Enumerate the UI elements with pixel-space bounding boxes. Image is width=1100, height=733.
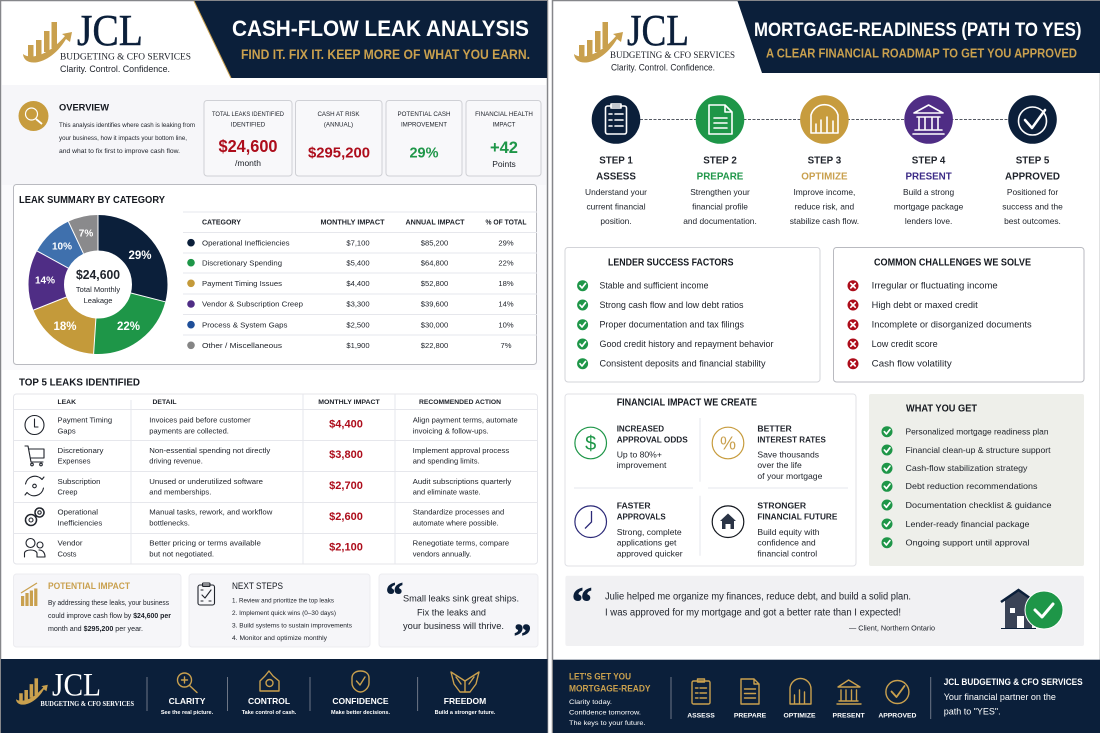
row: vendor: Costs <box>58 549 77 558</box>
donut chart <box>33 215 165 354</box>
footer call to action: Confidence tomorrow. <box>569 710 641 716</box>
impact: approval odds: APPROVAL ODDS <box>617 434 688 444</box>
table: top 5 leaks: DETAIL <box>152 399 177 406</box>
kpi card: health impact: FINANCIAL HEALTH <box>475 111 533 118</box>
kpi card: total leaks: IDENTIFIED <box>231 122 266 128</box>
testimonial <box>565 576 1084 646</box>
row: discretionary: and spending limits. <box>413 457 480 466</box>
header banner <box>194 1 547 78</box>
overview: OVERVIEW <box>59 102 110 112</box>
step 5 <box>1002 95 1063 226</box>
icon: shield check <box>352 671 369 692</box>
panel: what you get: WHAT YOU GET <box>906 404 977 415</box>
card: quote: Small leaks sink great ships. <box>403 594 519 605</box>
step 3 <box>790 95 859 226</box>
panel: lender success factors: LENDER SUCCESS FACTORS <box>608 258 734 269</box>
check list: Stable and sufficient income <box>600 280 709 290</box>
footer item: confidence: Make better decisions. <box>331 710 390 716</box>
impact: faster approvals: APPROVALS <box>617 511 666 521</box>
footer item: approved: APPROVED <box>878 712 917 719</box>
icon: open quote: “ <box>386 577 403 614</box>
icon: document <box>741 679 759 704</box>
icon: check circle <box>1018 107 1046 135</box>
step 2: STEP 2 <box>703 155 737 166</box>
step 5: Positioned for <box>1007 187 1058 197</box>
footer item: assess <box>687 679 715 719</box>
logo: JCL <box>77 6 143 55</box>
footer call to action <box>569 671 650 727</box>
card: potential impact: could improve cash flow by $24,600 per <box>48 613 171 620</box>
donut chart: 14% <box>35 276 55 286</box>
row: subscription: Unused or underutilized software <box>149 477 263 486</box>
impact: financial future: STRONGER <box>757 500 807 510</box>
icon: logo chart <box>574 22 623 63</box>
footer logo <box>16 668 134 708</box>
kpi card: health impact: IMPACT <box>493 122 516 128</box>
kpi card: health impact: Points <box>492 159 516 169</box>
testimonial: I was approved for my mortgage and got a better rate than I expected! <box>605 607 901 618</box>
check list: Personalized mortgage readiness plan <box>906 426 1049 436</box>
step 4: mortgage package <box>894 201 964 211</box>
footer item: approved <box>878 680 917 719</box>
row: payment timing: payments are collected. <box>149 426 229 435</box>
impact: interest rates: INTEREST RATES <box>757 434 826 444</box>
footer <box>553 660 1100 733</box>
impact: interest rates: Save thousands <box>757 449 819 459</box>
row: vendor: Vendor <box>58 539 83 548</box>
kpi card: cash at risk: $295,200 <box>308 146 370 162</box>
testimonial: Julie helped me organize my finances, reduce debt, and build a solid plan. <box>605 592 911 603</box>
footer company info: path to "YES". <box>944 707 1001 717</box>
impact: faster approvals: FASTER <box>617 500 651 510</box>
row: discretionary: Non-essential spending not directly <box>149 446 270 455</box>
row: operational: bottlenecks. <box>149 518 190 527</box>
kpi card: potential improvement: IMPROVEMENT <box>401 122 447 128</box>
step 2: PREPARE <box>697 172 744 183</box>
footer <box>1 659 548 733</box>
card: next steps: 2. Implement quick wins (0–30 days) <box>232 610 336 617</box>
icon: close quote: ” <box>514 618 531 655</box>
card: quote <box>379 574 538 655</box>
card: potential impact: month and $295,200 per year. <box>48 626 143 633</box>
icon: butterfly <box>451 672 479 692</box>
check list <box>577 280 774 369</box>
impact: interest rates <box>712 424 826 481</box>
check list: Documentation checklist & guidance <box>906 500 1052 510</box>
row: payment timing: Invoices paid before customer <box>149 416 251 425</box>
footer item: confidence: CONFIDENCE <box>332 696 389 706</box>
row: payment timing: Align payment terms, automate <box>413 416 518 425</box>
step 1: STEP 1 <box>599 155 633 166</box>
row: payment timing: Payment Timing <box>58 416 112 425</box>
footer company info: JCL BUDGETING & CFO SERVICES <box>944 677 1083 687</box>
check list: Good credit history and repayment behavior <box>600 339 774 349</box>
row: subscription: Creep <box>58 488 78 497</box>
step 3: STEP 3 <box>808 155 842 166</box>
cross list: Incomplete or disorganized documents <box>872 320 1032 330</box>
step 1: current financial <box>586 201 646 211</box>
footer item: control: CONTROL <box>248 696 290 706</box>
card: next steps <box>189 574 370 647</box>
card: next steps: 1. Review and prioritize the top leaks <box>232 598 335 605</box>
row: operational: Operational <box>58 508 98 517</box>
logo: Clarity. Control. Confidence. <box>60 64 170 74</box>
footer item: freedom <box>435 672 496 716</box>
icon: checklist <box>692 679 710 704</box>
step 2 <box>683 95 757 226</box>
testimonial: — Client, Northern Ontario <box>849 624 935 633</box>
footer item: prepare: PREPARE <box>734 712 767 719</box>
footer item: freedom: Build a stronger future. <box>435 710 496 716</box>
row: subscription: and memberships. <box>149 488 211 497</box>
row: subscription: Subscription <box>58 477 100 486</box>
check list: Ongoing support until approval <box>906 538 1030 548</box>
kpi card: cash at risk <box>296 100 382 176</box>
step 3: OPTIMIZE <box>801 172 848 183</box>
table: top 5 leaks: LEAK <box>58 399 76 406</box>
title: CASH-FLOW LEAK ANALYSIS <box>232 16 529 41</box>
category table: % OF TOTAL <box>486 220 527 226</box>
category table: $3,300 <box>346 300 370 309</box>
kpi card: cash at risk: CASH AT RISK <box>317 111 360 118</box>
icon: house with check <box>1001 590 1063 629</box>
impact: faster approvals <box>575 500 683 559</box>
impact: interest rates: of your mortgage <box>757 471 823 481</box>
row: vendor: Better pricing or terms available <box>149 539 261 548</box>
kpi card: health impact <box>466 100 541 176</box>
check list: Financial clean-up & structure support <box>906 445 1051 455</box>
footer item: clarity <box>161 673 214 716</box>
heading: LEAK SUMMARY BY CATEGORY <box>19 195 165 206</box>
logo: BUDGETING & CFO SERVICES <box>60 52 191 62</box>
footer call to action: MORTGAGE-READY <box>569 684 650 694</box>
cross list: Irregular or fluctuating income <box>872 280 998 290</box>
footer item: prepare <box>734 679 767 719</box>
overview: your business, how it impacts your bottom line, <box>59 135 187 142</box>
overview <box>18 101 195 155</box>
panel: lender success factors <box>565 248 820 382</box>
cross list: High debt or maxed credit <box>872 300 978 310</box>
logo: BUDGETING & CFO SERVICES <box>610 51 735 61</box>
kpi card: total leaks: /month <box>235 158 261 168</box>
impact: interest rates: over the life <box>757 460 802 470</box>
footer item: control: Take control of cash. <box>242 710 297 716</box>
row: subscription: and eliminate waste. <box>413 488 481 497</box>
category table: $39,600 <box>421 300 448 309</box>
row: discretionary: $3,800 <box>329 449 363 461</box>
category table: $1,900 <box>346 341 370 350</box>
card: potential impact <box>14 574 181 647</box>
donut chart: $24,600 <box>76 268 120 282</box>
row: vendor: but not negotiated. <box>149 549 214 558</box>
donut chart: 10% <box>52 242 72 252</box>
footer item: optimize <box>783 678 816 719</box>
step 1: Understand your <box>585 187 647 197</box>
kpi card: potential improvement: 29% <box>409 146 439 162</box>
category table: $2,500 <box>346 320 370 329</box>
row: operational: Manual tasks, rework, and workflow <box>149 508 273 517</box>
impact: faster approvals: applications get <box>617 538 677 548</box>
impact: financial future: Build equity with <box>757 527 820 537</box>
category table <box>183 212 537 350</box>
check list: Proper documentation and tax filings <box>600 320 745 330</box>
kpi card: total leaks: $24,600 <box>218 136 278 156</box>
kpi card: total leaks: TOTAL LEAKS IDENTIFIED <box>212 111 284 118</box>
impact: approval odds: Up to 80%+ <box>617 449 662 459</box>
footer item: confidence <box>331 671 390 716</box>
footer item: control <box>242 671 297 716</box>
icon: bank <box>837 680 861 704</box>
category table: $4,400 <box>346 279 370 288</box>
panel: financial impact <box>565 394 856 566</box>
icon: growth chart <box>21 583 37 606</box>
category table: $85,200 <box>421 238 448 247</box>
footer company info: Your financial partner on the <box>944 692 1056 702</box>
kpi card: potential improvement: POTENTIAL CASH <box>397 111 451 118</box>
row: payment timing: Gaps <box>58 426 76 435</box>
impact: interest rates: BETTER <box>757 424 793 434</box>
table: top 5 leaks: MONTHLY IMPACT <box>318 399 381 406</box>
donut chart: 22% <box>117 321 140 333</box>
subtitle: FIND IT. FIX IT. KEEP MORE OF WHAT YOU EARN. <box>241 46 530 62</box>
footer call to action: The keys to your future. <box>569 720 646 727</box>
step 4: PRESENT <box>905 172 952 183</box>
category table: 10% <box>498 320 514 329</box>
card: next steps: NEXT STEPS <box>232 581 283 592</box>
panel: financial impact: FINANCIAL IMPACT WE CREATE <box>617 398 757 409</box>
step 5: success and the <box>1002 201 1063 211</box>
category table: 18% <box>498 279 514 288</box>
donut chart: 29% <box>128 250 152 262</box>
logo: JCL <box>627 6 689 55</box>
icon: people <box>24 538 45 557</box>
impact: approval odds: improvement <box>617 460 667 470</box>
category table: 22% <box>498 258 514 267</box>
logo <box>574 6 735 72</box>
step 4: STEP 4 <box>912 155 946 166</box>
row: operational <box>26 508 504 527</box>
category table: $22,800 <box>421 341 448 350</box>
footer item: present: PRESENT <box>833 712 865 719</box>
icon: money bag <box>260 671 279 691</box>
category table: Payment Timing Issues <box>202 279 282 288</box>
footer call to action: LET'S GET YOU <box>569 671 631 681</box>
icon: cycle arrows <box>25 476 44 496</box>
row: vendor <box>24 538 509 558</box>
step 4: Build a strong <box>903 187 955 197</box>
category table: Operational Inefficiencies <box>202 238 290 247</box>
icon: chart in house <box>811 105 838 133</box>
step 4: lenders love. <box>905 216 952 226</box>
row: subscription <box>25 476 512 497</box>
impact: financial future: confidence and <box>757 538 816 548</box>
category table: 29% <box>498 238 514 247</box>
category table: Discretionary Spending <box>202 258 282 267</box>
donut chart: 7% <box>79 228 93 240</box>
row: payment timing <box>25 416 518 435</box>
table: top 5 leaks: RECOMMENDED ACTION <box>419 399 501 406</box>
cross list: Cash flow volatility <box>872 358 952 368</box>
impact: financial future: FINANCIAL FUTURE <box>757 511 838 521</box>
step 3: stabilize cash flow. <box>790 216 859 226</box>
icon: checklist <box>606 104 626 134</box>
donut chart: 18% <box>53 321 77 333</box>
page: cash-flow leak analysis <box>0 0 548 733</box>
row: operational: $2,600 <box>329 511 363 523</box>
card: quote: Fix the leaks and <box>417 608 486 618</box>
check list: Consistent deposits and financial stability <box>600 358 766 368</box>
row: subscription: Audit subscriptions quarterly <box>413 477 512 486</box>
icon: document <box>709 105 732 134</box>
category table: ANNUAL IMPACT <box>406 220 465 226</box>
check list: Strong cash flow and low debt ratios <box>600 300 744 310</box>
step 2: Strengthen your <box>690 187 750 197</box>
icon: quote mark: “ <box>572 579 592 624</box>
overview: and what to fix first to improve cash flow. <box>59 148 180 155</box>
impact: faster approvals: approved quicker <box>617 549 683 559</box>
footer item: present <box>833 680 865 719</box>
roadmap steps <box>585 95 1063 226</box>
impact: approval odds <box>575 424 688 470</box>
impact: approval odds: INCREASED <box>617 424 664 434</box>
check list: Lender-ready financial package <box>906 519 1030 529</box>
kpi card: health impact: +42 <box>490 139 518 157</box>
category table: MONTHLY IMPACT <box>320 220 385 226</box>
logo: Clarity. Control. Confidence. <box>611 62 715 72</box>
footer logo: BUDGETING & CFO SERVICES <box>40 700 134 708</box>
category table: $52,800 <box>421 279 448 288</box>
row: operational: Inefficiencies <box>58 518 102 527</box>
icon: logo chart <box>23 22 72 63</box>
footer logo: JCL <box>52 668 101 704</box>
table: top 5 leaks <box>14 394 538 564</box>
row: discretionary: Implement approval process <box>413 446 509 455</box>
row: discretionary <box>25 446 509 466</box>
category table: $5,400 <box>346 258 370 267</box>
icon: chart <box>790 678 811 704</box>
icon: check circle <box>886 680 909 704</box>
footer item: assess: ASSESS <box>687 712 715 719</box>
card: quote: your business will thrive. <box>403 621 504 632</box>
icon: magnifier <box>178 673 197 692</box>
icon: bank <box>913 105 944 134</box>
cross list <box>848 280 1032 369</box>
impact: interest rates: % <box>720 434 736 454</box>
row: discretionary: Discretionary <box>58 446 104 455</box>
row: subscription: $2,700 <box>329 480 363 492</box>
impact: financial future <box>712 500 838 559</box>
category table: CATEGORY <box>202 220 241 226</box>
row: vendor: $2,100 <box>329 542 363 554</box>
donut chart: Leakage <box>84 296 112 305</box>
step 1 <box>585 95 647 226</box>
kpi card: cash at risk: (ANNUAL) <box>324 122 353 128</box>
logo <box>23 6 191 74</box>
category table: $30,000 <box>421 320 448 329</box>
icon: gears <box>26 508 44 526</box>
step 2: financial profile <box>692 201 748 211</box>
footer company info <box>944 677 1083 717</box>
step 1: ASSESS <box>596 172 636 183</box>
step 3: Improve income, <box>793 187 855 197</box>
row: discretionary: Expenses <box>58 457 91 466</box>
row: operational: automate where possible. <box>413 518 499 527</box>
row: payment timing: invoicing & follow-ups. <box>413 426 489 435</box>
footer item: clarity: CLARITY <box>169 696 206 706</box>
check list <box>882 426 1052 548</box>
row: operational: Standardize processes and <box>413 508 504 517</box>
panel: common challenges <box>834 248 1084 382</box>
step 5: STEP 5 <box>1016 155 1050 166</box>
icon: cart <box>25 446 44 466</box>
category table: Vendor & Subscription Creep <box>202 300 303 309</box>
footer call to action: Clarity today. <box>569 699 612 706</box>
impact: financial future: financial control <box>757 549 817 559</box>
step 2: and documentation. <box>683 216 757 226</box>
icon: clipboard <box>198 583 214 605</box>
panel: common challenges: COMMON CHALLENGES WE SOLVE <box>874 258 1031 269</box>
category table: 14% <box>498 300 514 309</box>
header banner <box>738 1 1100 73</box>
cross list: Low credit score <box>872 339 938 349</box>
step 5: APPROVED <box>1005 172 1060 183</box>
category table: Process & System Gaps <box>202 320 288 329</box>
row: vendor: Renegotiate terms, compare <box>413 539 509 548</box>
category table: 7% <box>501 341 512 350</box>
footer item: optimize: OPTIMIZE <box>783 712 816 719</box>
check list: Cash-flow stabilization strategy <box>906 463 1028 473</box>
card: potential impact: By addressing these leaks, your business <box>48 600 169 607</box>
impact: faster approvals: Strong, complete <box>617 527 682 537</box>
check list: Debt reduction recommendations <box>906 481 1038 491</box>
overview: This analysis identifies where cash is leaking from <box>59 122 195 129</box>
row: payment timing: $4,400 <box>329 418 363 430</box>
impact: approval odds: $ <box>585 433 596 455</box>
panel: what you get <box>869 394 1084 566</box>
category table: Other / Miscellaneous <box>202 341 282 350</box>
page: mortgage readiness <box>552 0 1100 733</box>
step 3: reduce risk, and <box>795 201 855 211</box>
icon: clock <box>25 416 44 434</box>
heading: top 5 leaks: TOP 5 LEAKS IDENTIFIED <box>19 378 140 388</box>
row: discretionary: driving revenue. <box>149 457 203 466</box>
step 1: position. <box>600 216 632 226</box>
icon: magnifier <box>18 101 48 131</box>
category table: $7,100 <box>346 238 370 247</box>
row: vendor: vendors annually. <box>413 549 471 558</box>
donut chart: Total Monthly <box>76 285 120 294</box>
panel: leak summary <box>14 184 537 364</box>
card: next steps: 4. Monitor and optimize monthly <box>232 635 328 642</box>
card: next steps: 3. Build systems to sustain improvements <box>232 622 353 630</box>
footer item: clarity: See the real picture. <box>161 710 214 716</box>
card: potential impact: POTENTIAL IMPACT <box>48 581 130 592</box>
kpi card: potential improvement <box>386 100 462 176</box>
step 4 <box>894 95 964 226</box>
category table: $64,800 <box>421 258 448 267</box>
kpi card: total leaks <box>204 100 292 176</box>
step 5: best outcomes. <box>1004 216 1061 226</box>
footer item: freedom: FREEDOM <box>444 696 486 706</box>
